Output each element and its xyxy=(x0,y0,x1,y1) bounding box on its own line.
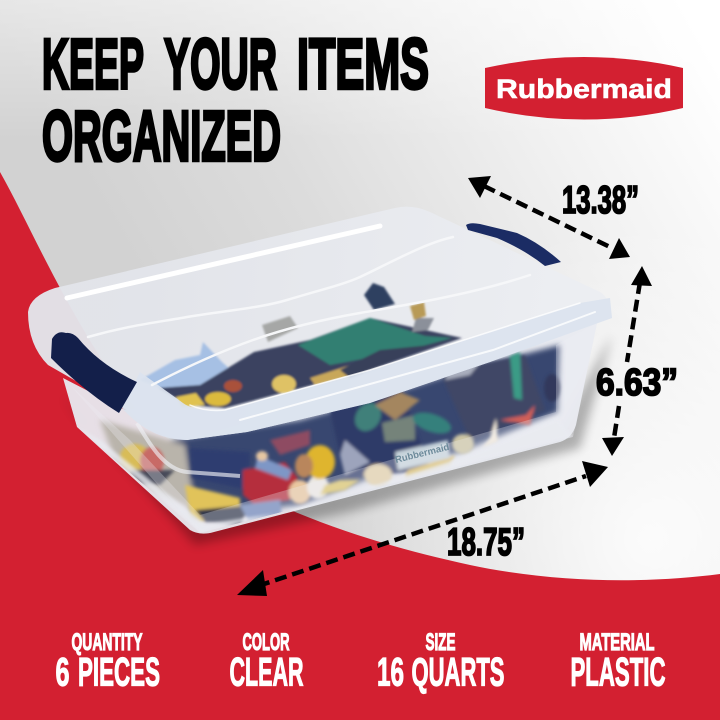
label: 18.75: 18.75” xyxy=(447,521,525,564)
arrow: length 18.75 xyxy=(237,461,608,596)
logo: Rubbermaid xyxy=(485,57,683,120)
spec: size: 16 xyxy=(377,650,404,694)
title: ITEMS xyxy=(297,26,429,104)
toys xyxy=(120,350,560,525)
contents seen through lid xyxy=(140,283,462,408)
milky front wall haze xyxy=(102,344,574,526)
title xyxy=(42,26,429,176)
label: 6.63: 6.63” xyxy=(596,362,678,404)
lid plate xyxy=(28,207,612,440)
title: YOUR xyxy=(164,26,277,104)
title: KEEP xyxy=(42,26,144,104)
lid rim band xyxy=(122,298,612,440)
arrow: height 6.63 xyxy=(602,266,652,456)
spec: quantity: QUANTITY xyxy=(72,629,142,656)
spec: material xyxy=(570,629,666,694)
soft base tones xyxy=(100,345,560,518)
spec: color: CLEAR xyxy=(230,650,304,694)
spec: material: MATERIAL xyxy=(580,629,655,656)
red swoosh background xyxy=(0,172,720,720)
label: 13.38: 13.38” xyxy=(562,179,639,222)
spec: size xyxy=(377,629,504,694)
right navy handle xyxy=(466,223,561,266)
spec: size: QUARTS xyxy=(412,650,504,694)
spec: quantity: PIECES xyxy=(78,650,160,694)
left navy handle xyxy=(51,332,137,413)
inner handle loop xyxy=(137,423,240,476)
storage box xyxy=(28,207,612,545)
spec: color xyxy=(230,629,304,694)
arrow: depth 13.38 xyxy=(468,176,630,259)
spec: quantity: 6 xyxy=(56,650,70,694)
box contents seen through front xyxy=(94,341,574,532)
lid highlight lines xyxy=(67,226,595,420)
box body xyxy=(63,318,612,534)
spec: size: SIZE xyxy=(426,629,456,656)
logo: Rubbermaid: Rubbermaid xyxy=(496,74,672,104)
tag with brand name inside box: Rubbermaid xyxy=(394,442,451,466)
spec: quantity xyxy=(56,629,160,694)
title: ORGANIZED xyxy=(42,98,281,176)
box shadow xyxy=(62,335,612,545)
spec: color: COLOR xyxy=(242,629,290,656)
